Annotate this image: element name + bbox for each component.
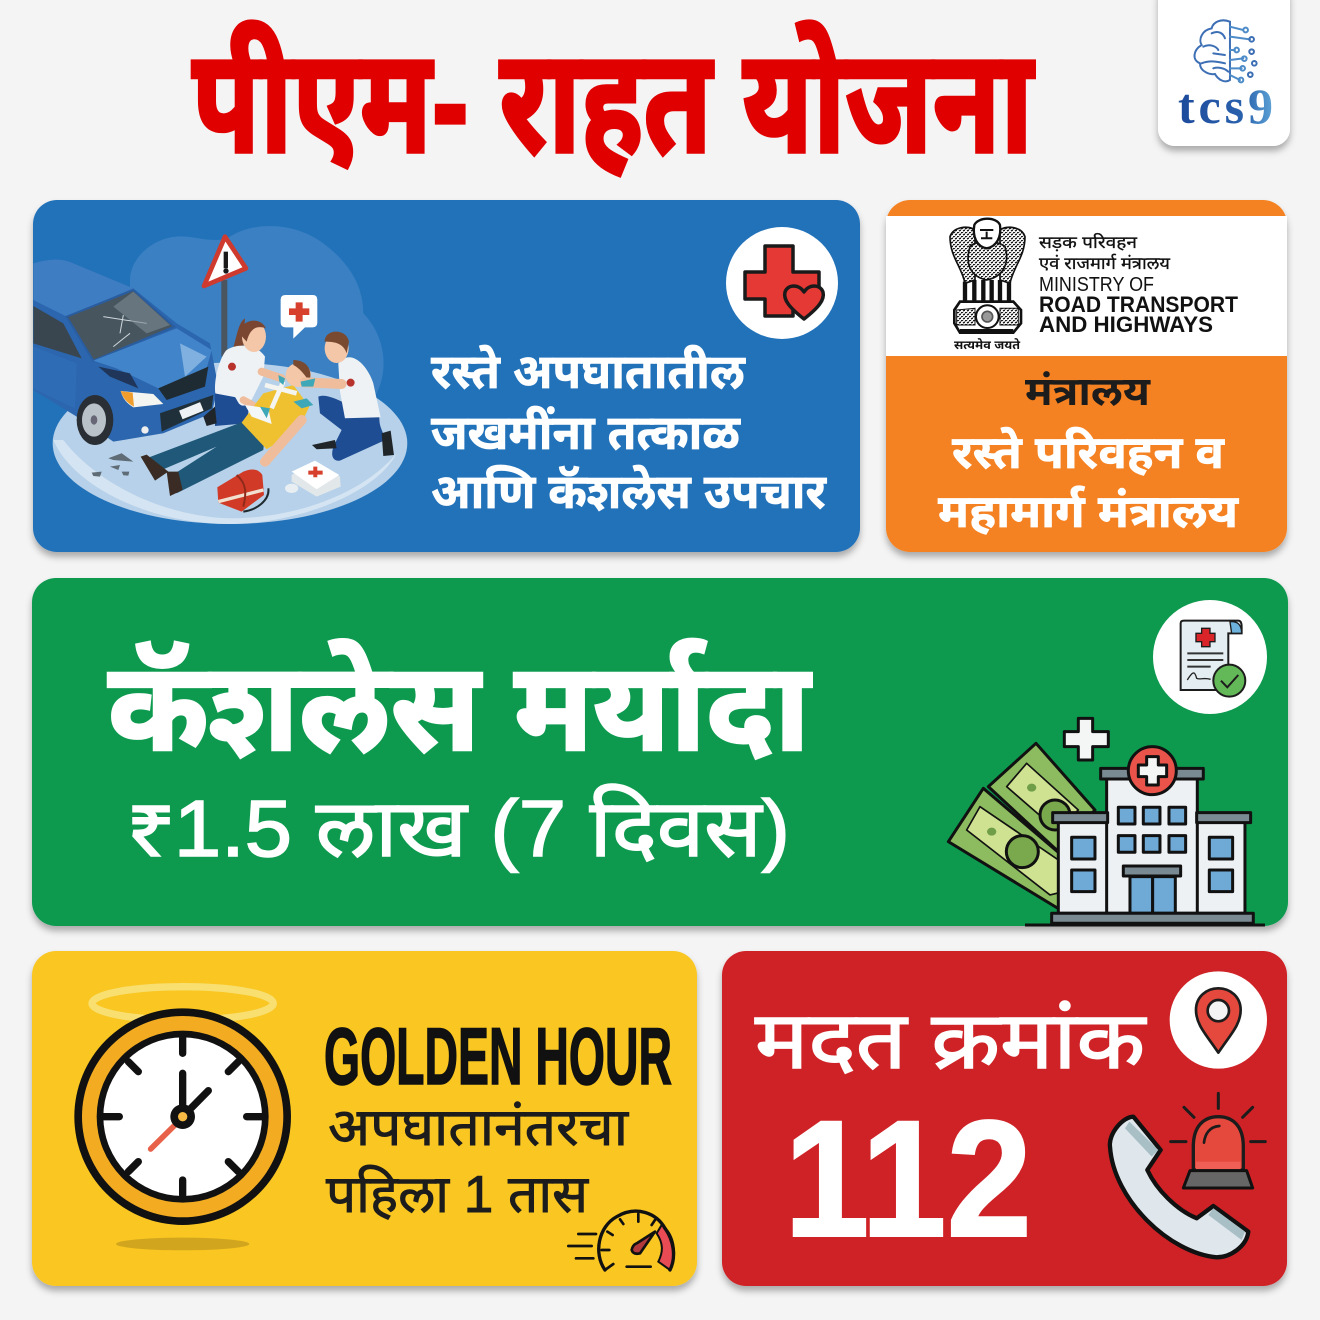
hospital building <box>1025 747 1265 925</box>
icon: medical cross and heart <box>726 227 838 339</box>
medic: woman <box>203 318 282 426</box>
logo wordmark: tcs9 <box>1178 78 1273 134</box>
illustration: accident first aid <box>33 226 407 524</box>
icon: emergency siren <box>1171 1093 1265 1188</box>
cashless heading: आणि कॅशलेस उपचार <box>431 464 827 519</box>
panel: golden hour <box>32 951 697 1286</box>
ministry name: रस्ते परिवहन व <box>952 425 1225 478</box>
ministry wordmark: AND HIGHWAYS <box>1039 312 1213 337</box>
ministry logo band <box>886 216 1287 356</box>
ministry wordmark: सड़क परिवहन <box>1039 232 1138 252</box>
patient <box>141 360 313 496</box>
panel: cashless limit <box>32 578 1288 926</box>
icon: approved document <box>1153 600 1267 714</box>
ministry name <box>938 425 1239 537</box>
ministry wordmark: MINISTRY OF <box>1039 274 1154 296</box>
golden hour heading: GOLDEN HOUR <box>324 1012 672 1102</box>
icon: circuit brain <box>1194 20 1257 82</box>
label: ministry: मंत्रालय <box>1025 370 1151 414</box>
banknotes <box>948 743 1095 912</box>
cashless heading: जखमींना तत्काळ <box>431 405 741 460</box>
first aid book <box>285 461 341 497</box>
ministry wordmark: ROAD TRANSPORT <box>1039 292 1239 317</box>
panel: cashless treatment <box>33 200 860 552</box>
helpline number: 112 <box>784 1087 1032 1272</box>
title: पीएम- राहत योजना <box>192 20 1035 183</box>
icon: clock with halo <box>74 987 291 1250</box>
emblem motto: सत्यमेव जयते <box>954 337 1021 352</box>
speech bubble <box>281 295 317 339</box>
cashless heading: रस्ते अपघातातील <box>431 344 746 399</box>
first aid bag <box>217 469 268 512</box>
ministry wordmark <box>1039 232 1239 337</box>
illustration: hospital and money <box>948 718 1265 925</box>
ministry wordmark: एवं राजमार्ग मंत्रालय <box>1039 253 1171 273</box>
golden hour description: अपघातानंतरचा <box>328 1099 630 1157</box>
logo card <box>1158 0 1290 146</box>
panel: helpline <box>722 951 1287 1286</box>
icon: speedometer <box>568 1211 674 1270</box>
medic: man <box>301 332 394 461</box>
cashless heading <box>431 344 827 519</box>
ministry name: महामार्ग मंत्रालय <box>938 485 1239 537</box>
helpline heading: मदत क्रमांक <box>755 996 1147 1085</box>
golden hour description <box>326 1099 630 1224</box>
golden hour description: पहिला 1 तास <box>326 1166 589 1224</box>
limit amount: ₹1.5 लाख (7 दिवस) <box>127 784 790 873</box>
warning sign <box>204 237 246 357</box>
icon: location pin <box>1170 971 1267 1069</box>
icon: national emblem <box>950 219 1025 333</box>
debris <box>92 453 133 477</box>
car <box>33 260 218 445</box>
limit heading: कॅशलेस मर्यादा <box>108 638 812 777</box>
panel: ministry <box>886 200 1287 552</box>
icon: phone handset <box>1110 1117 1248 1257</box>
